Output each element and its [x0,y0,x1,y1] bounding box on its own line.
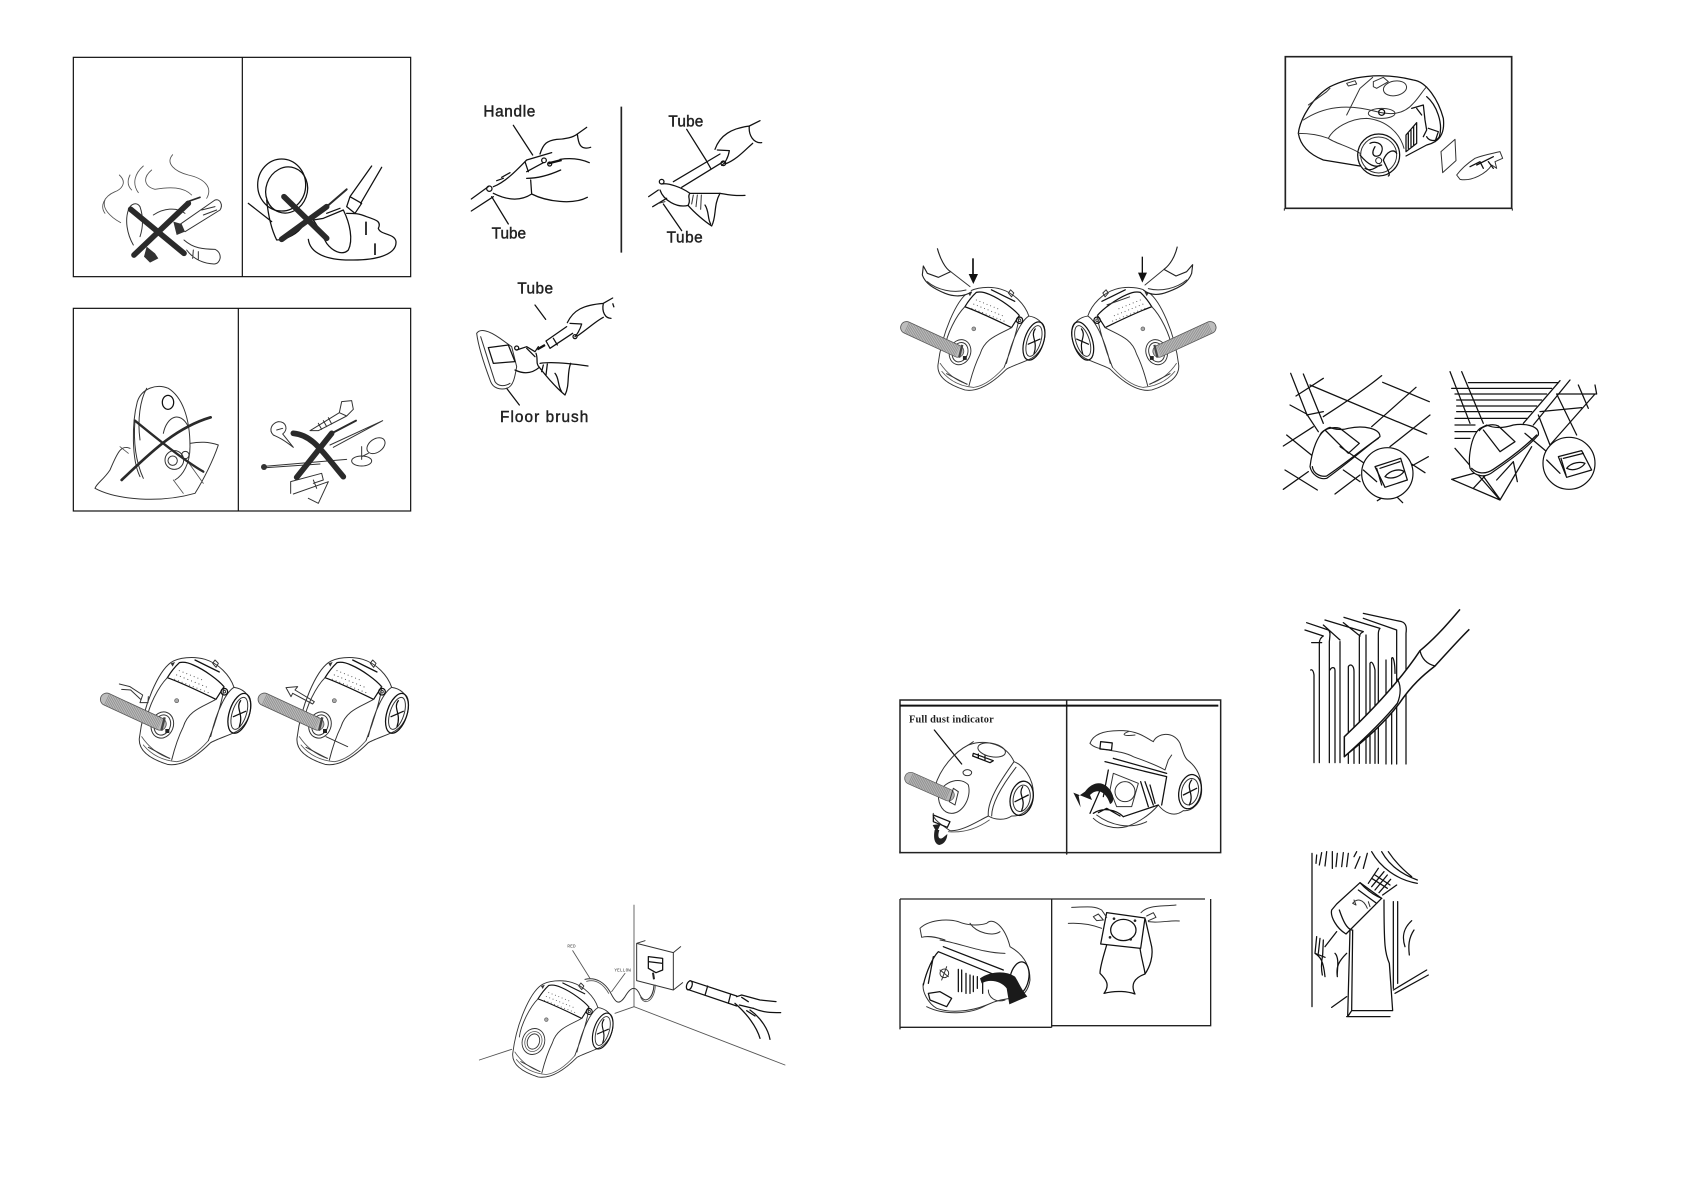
panel: removing and fitting the dust bag [900,899,1211,1029]
illustration: brush on hard floor tiles [1283,373,1430,503]
icon: cigarettes and smoke crossed out [103,155,221,264]
panel: warning frames, bottom pair [73,308,411,511]
label: Tube: Tube [668,114,703,131]
panel: pressing release buttons [907,247,1210,390]
vacuum [513,981,617,1077]
illustration: floor brush attachment [477,298,614,405]
room corner [479,905,785,1065]
label: RED: RED [567,945,576,950]
panel: assembling tube and handle [471,104,762,426]
panel: full dust indicator and opening lid [900,700,1221,855]
vacuum with arrow pulling hose out [264,658,413,765]
icon: bucket and spilled water crossed out [248,159,396,260]
divider [619,107,624,253]
panel: power connection scene [479,905,785,1077]
label: Full dust indicator: Full dust indicator [909,715,994,726]
label: Handle: Handle [483,104,535,121]
illustration: hands holding dust bag [1068,905,1179,994]
illustration: open vacuum with bag arrow [920,920,1032,1013]
label: Tube: Tube [667,230,703,247]
illustration: open vacuum with arrow [1073,731,1204,828]
label: Tube: Tube [517,280,553,297]
panel: warning frames, top pair [73,57,411,277]
panel: connecting the hose [107,658,413,765]
hose in hand [685,980,781,1039]
vacuum with arrow pushing hose in [107,658,255,765]
label: Floor brush: Floor brush [500,409,588,426]
icon: vacuum on fabric crossed out [95,386,218,499]
left vacuum and hand [907,248,1049,390]
illustration: vacuum rear with filter [1298,76,1503,180]
icon: pins, screw and clips crossed out [261,401,388,503]
illustration: tube sections joined [649,121,762,231]
illustration: brush on carpet [1450,372,1597,500]
panel: filter replacement [1284,57,1512,211]
panel: crevice tool on radiator [1305,609,1469,764]
panel: dusting brush on curtain [1312,852,1428,1017]
cord and plug [585,957,663,1002]
right vacuum and hand [1067,247,1210,390]
illustration: handle into tube [471,125,591,224]
illustration: closed vacuum with latch [911,741,1036,845]
label: Tube: Tube [492,226,526,243]
panel: floor brush settings [1283,372,1597,503]
label: YELLOW: YELLOW [614,969,631,974]
